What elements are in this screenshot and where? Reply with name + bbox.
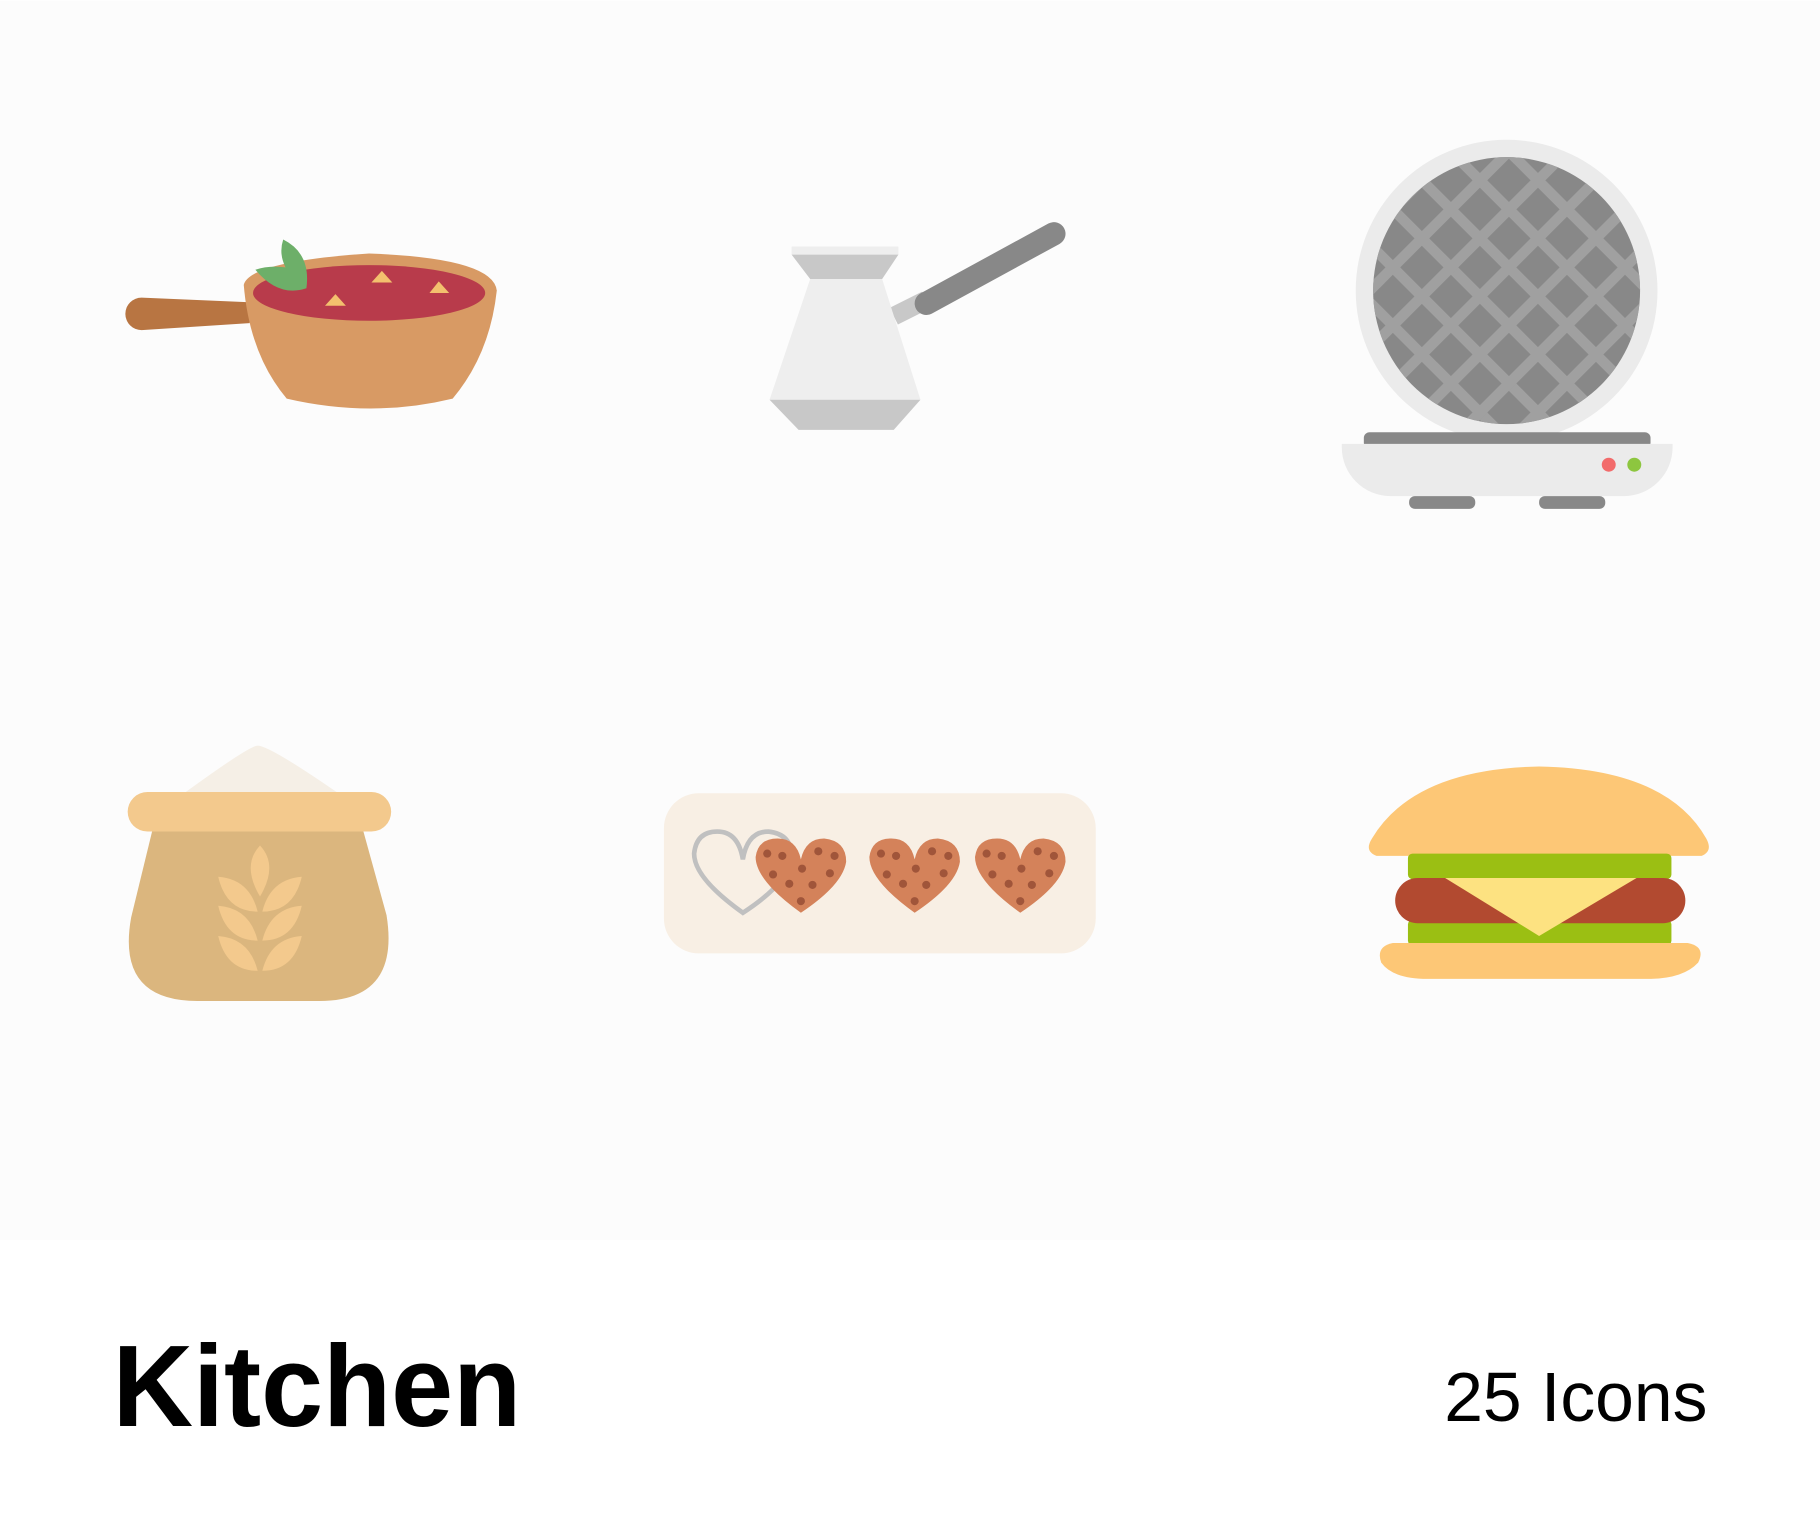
icon: burger [1369, 767, 1709, 979]
icon: soup pot [125, 240, 497, 408]
icon: waffle maker [1342, 140, 1672, 509]
icon: flour sack [128, 746, 391, 1001]
title: Kitchen [113, 1321, 521, 1451]
icon count: 25 Icons [1444, 1358, 1707, 1436]
icon: heart cookies box [664, 793, 1096, 953]
icon: coffee pot [770, 234, 1054, 430]
